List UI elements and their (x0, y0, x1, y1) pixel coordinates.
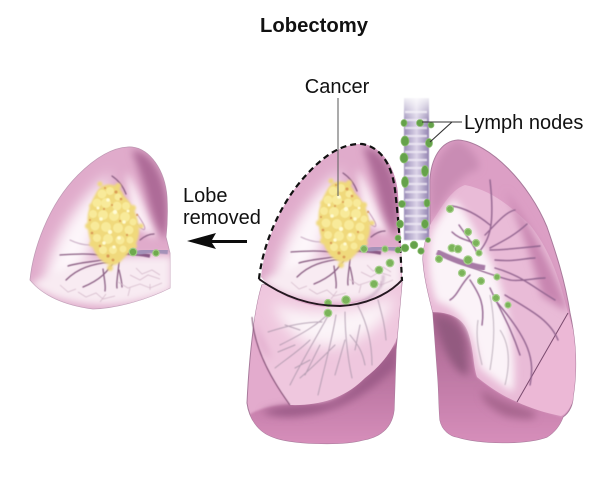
light lobe surface (421, 185, 568, 402)
dark lower surface (430, 312, 565, 445)
trachea lymph nodes (395, 120, 434, 254)
label: cancer with leader line: Cancer (305, 76, 370, 98)
removed lobe (30, 147, 172, 309)
green nodes (129, 248, 159, 256)
label: lobe removed (183, 185, 261, 229)
inner dark surface (250, 338, 400, 445)
label: cancer with leader line (305, 76, 370, 196)
label: lymph nodes with leader lines (422, 112, 583, 142)
lobe outline (30, 147, 170, 309)
tumour (85, 182, 144, 271)
upper lobe (261, 144, 403, 307)
label: lymph nodes with leader lines: Lymph nodes (464, 112, 583, 134)
left lung (247, 144, 403, 445)
fissure line (259, 279, 402, 306)
airway branches (447, 180, 558, 385)
right lung lymph nodes (436, 206, 511, 308)
label: lobe removed: Lobe (183, 185, 228, 207)
lung outline (423, 140, 576, 443)
lower lobe shape (247, 282, 402, 444)
title: Lobectomy (260, 15, 369, 37)
label: lobe removed: removed (183, 207, 261, 229)
trachea (395, 94, 434, 254)
outer lobe (517, 313, 578, 416)
dashed outline: lobe to remove (259, 144, 402, 281)
arrow: lobe removed (187, 233, 247, 249)
left lung lymph nodes (324, 246, 394, 317)
right lung (421, 140, 578, 445)
tumour (316, 178, 374, 268)
lower lobe airways (268, 300, 386, 395)
